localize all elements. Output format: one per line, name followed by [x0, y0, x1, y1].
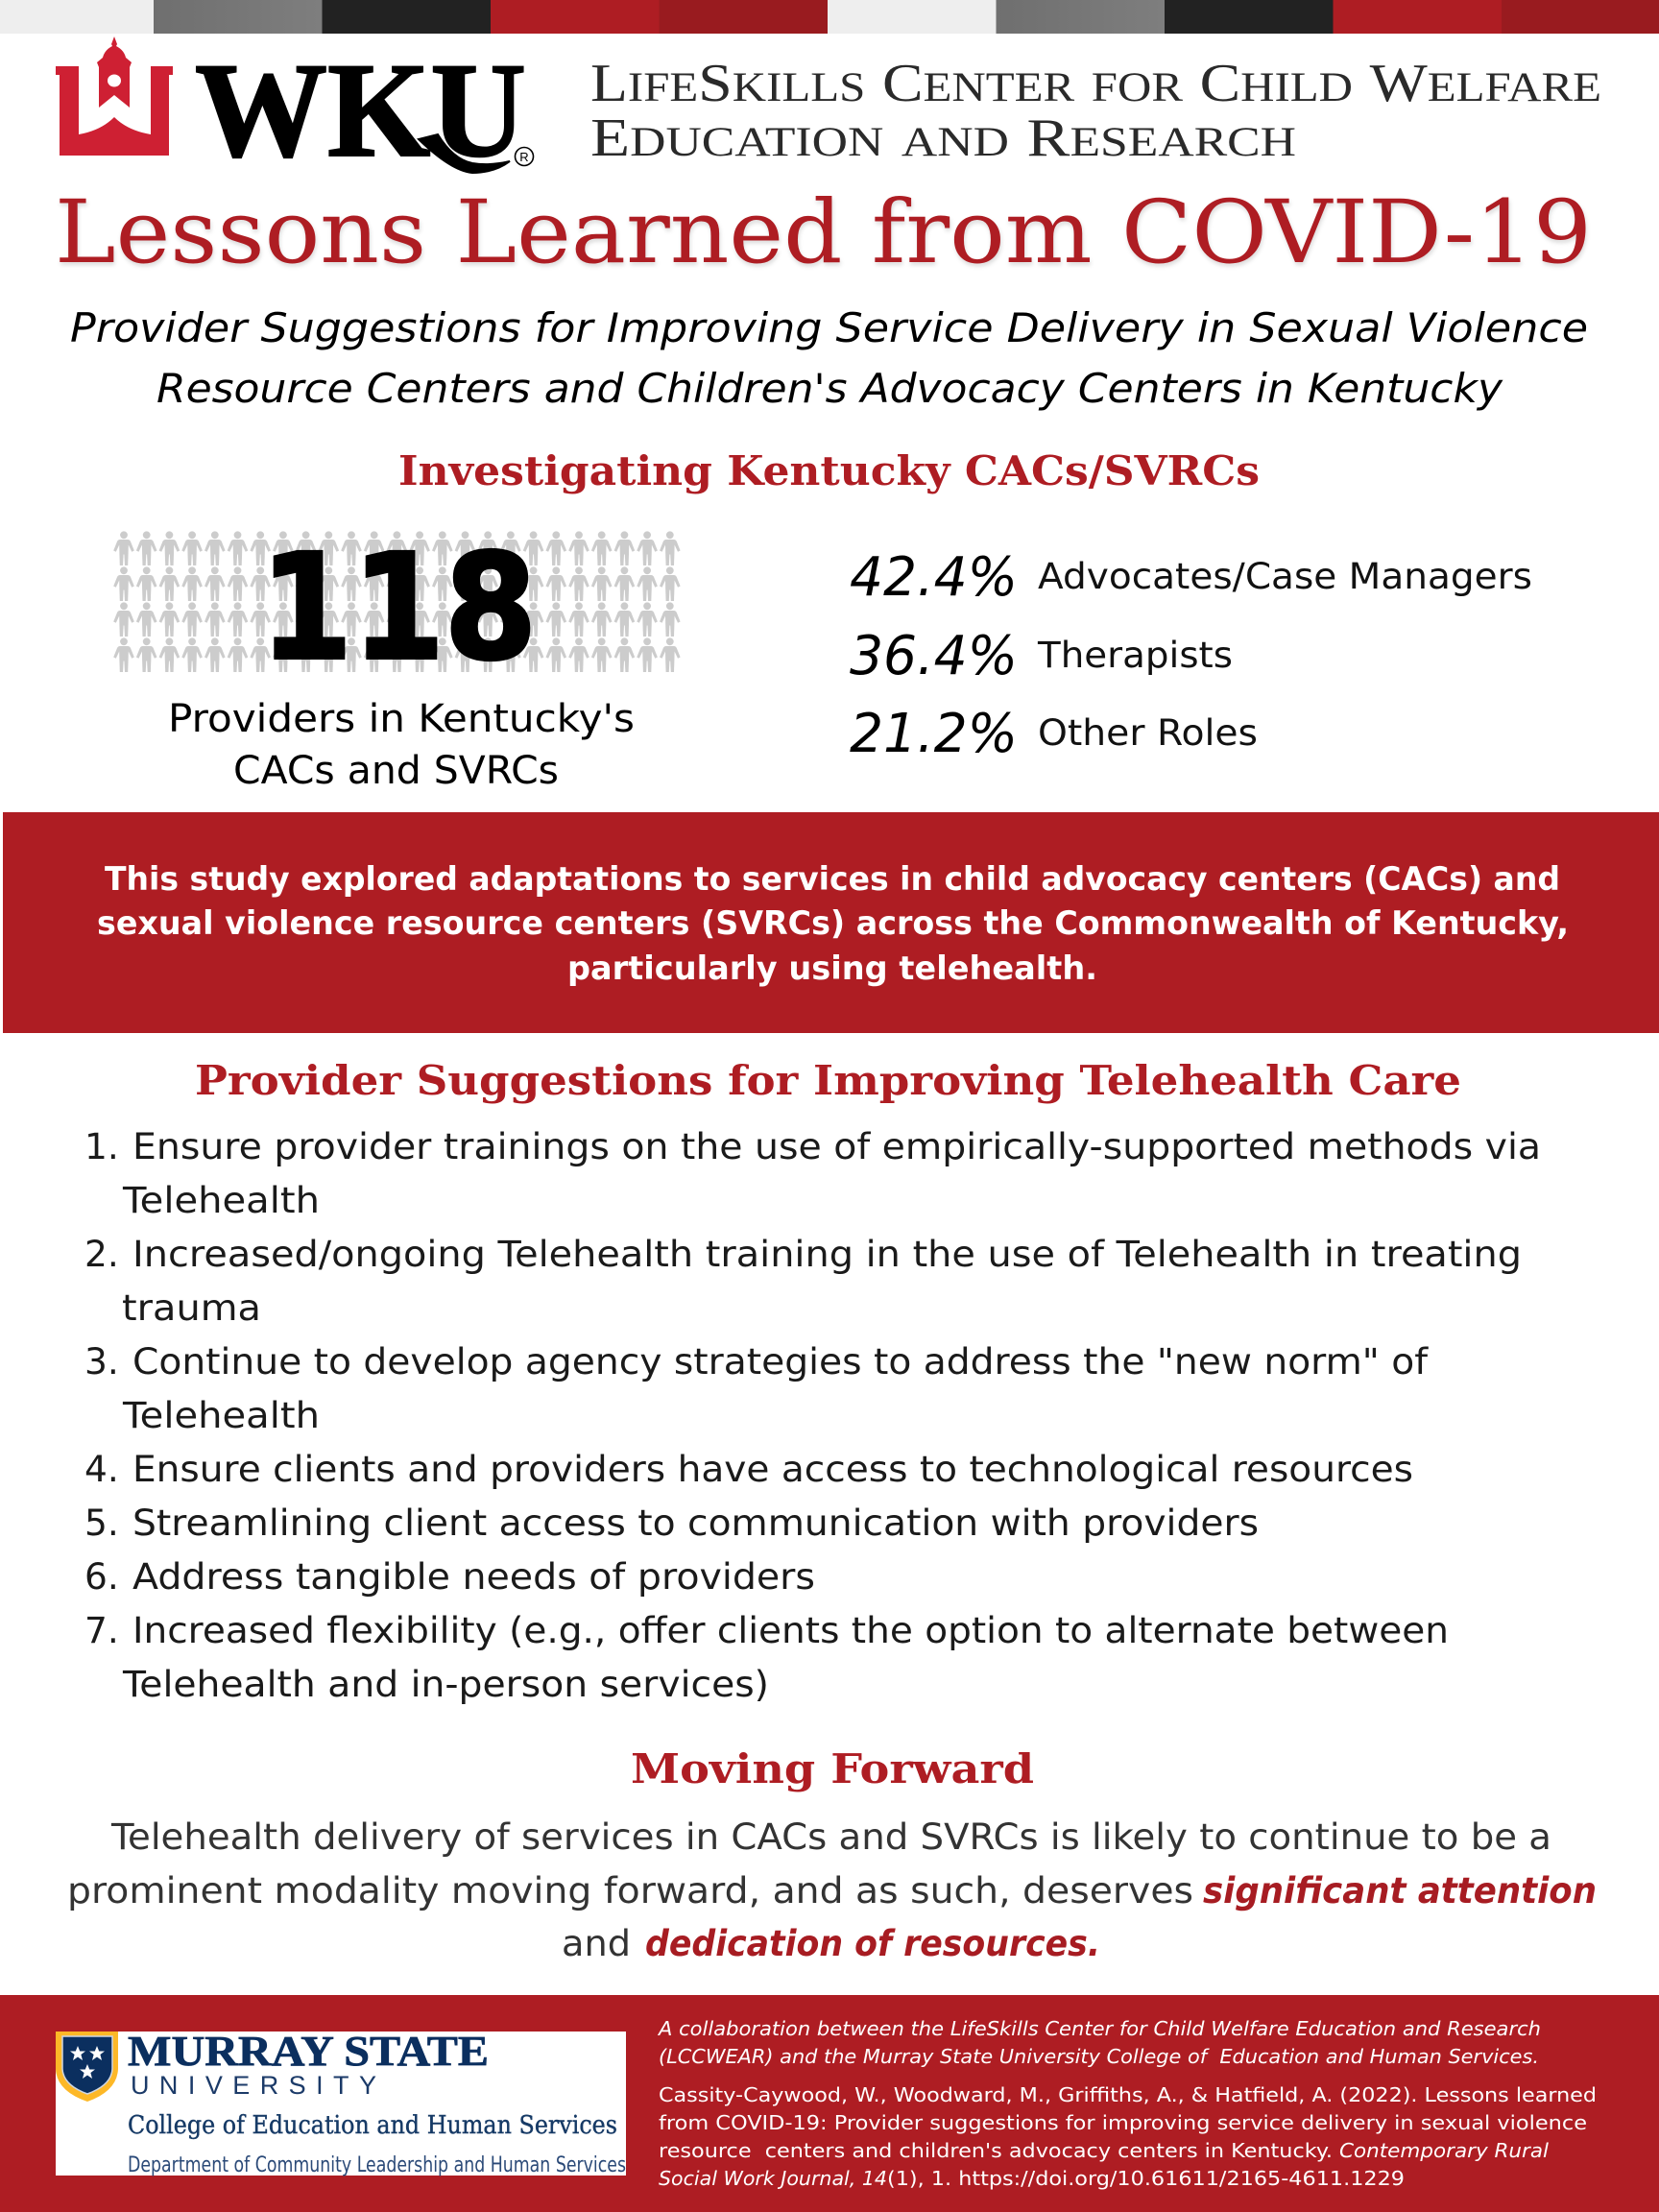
numbered list of suggestions: 3.: [84, 1340, 119, 1382]
role percentages: 21.2%: [850, 703, 1018, 765]
panel: study summary band: This study explored adaptations to services in child advocacy centers (CACs) and: [105, 860, 1560, 898]
numbered list of suggestions: Streamlining client access to communication with providers: [132, 1502, 1259, 1544]
numbered list of suggestions: 1.: [84, 1125, 119, 1167]
stat: 118: 118: [260, 523, 537, 692]
title: Lessons Learned from COVID-19: [55, 182, 1592, 283]
citation: from COVID-19: Provider suggestions for improving service delivery in sexual violence: [659, 2111, 1587, 2134]
collaboration statement: [657, 2017, 1541, 2068]
subtitle: [70, 304, 1588, 412]
moving forward paragraph: dedication of resources.: [645, 1922, 1100, 1964]
numbered list of suggestions: Address tangible needs of providers: [132, 1555, 815, 1598]
role percentages: Other Roles: [1038, 711, 1258, 754]
numbered list of suggestions: trauma: [122, 1286, 261, 1329]
numbered list of suggestions: 5.: [84, 1502, 119, 1544]
citation: Social Work Journal, 14: [659, 2167, 887, 2190]
moving forward paragraph: significant attention: [1203, 1869, 1597, 1911]
panel: study summary band: particularly using telehealth.: [567, 950, 1097, 987]
Murray State logo: [56, 2028, 626, 2177]
citation: resource centers and children's advocacy centers in Kentucky.: [659, 2139, 1333, 2162]
role percentages: 36.4%: [850, 625, 1018, 687]
subtitle: Resource Centers and Children's Advocacy Centers in Kentucky: [156, 365, 1503, 412]
subtitle: Provider Suggestions for Improving Service Delivery in Sexual Violence: [70, 304, 1588, 351]
numbered list of suggestions: [84, 1125, 1541, 1705]
citation: [659, 2083, 1597, 2190]
numbered list of suggestions: 4.: [84, 1448, 119, 1490]
heading: provider suggestions: Provider Suggestions for Improving Telehealth Care: [195, 1057, 1461, 1104]
numbered list of suggestions: Increased/ongoing Telehealth training in the use of Telehealth in treating: [132, 1233, 1522, 1275]
panel: study summary band: sexual violence resource centers (SVRCs) across the Commonwealth of Kentucky,: [97, 904, 1569, 942]
collaboration statement: A collaboration between the LifeSkills Center for Child Welfare Education and Research: [657, 2017, 1541, 2040]
role percentages: 42.4%: [850, 546, 1018, 609]
numbered list of suggestions: Ensure provider trainings on the use of empirically-supported methods via: [132, 1125, 1541, 1167]
Murray State logo: UNIVERSITY: [131, 2071, 376, 2100]
moving forward paragraph: Telehealth delivery of services in CACs and SVRCs is likely to continue to be a: [110, 1815, 1551, 1858]
icon: Murray State shield: [56, 2032, 118, 2102]
stat caption: [168, 697, 635, 793]
numbered list of suggestions: Continue to develop agency strategies to address the "new norm" of: [132, 1340, 1429, 1382]
centre name: LifeSkills Center for Child Welfare: [590, 49, 1601, 114]
Murray State logo: College of Education and Human Services: [128, 2111, 617, 2140]
moving forward paragraph: prominent modality moving forward, and as such, deserves: [67, 1869, 1193, 1911]
numbered list of suggestions: 6.: [84, 1555, 119, 1598]
citation: (1), 1. https://doi.org/10.61611/2165-4611.1229: [887, 2167, 1405, 2190]
stat caption: Providers in Kentucky's: [168, 697, 635, 741]
collaboration statement: (LCCWEAR) and the Murray State University College of Education and Human Services.: [659, 2045, 1539, 2068]
numbered list of suggestions: Telehealth and in-person services): [122, 1663, 769, 1705]
numbered list of suggestions: Telehealth: [122, 1394, 320, 1436]
numbered list of suggestions: Increased flexibility (e.g., offer clients the option to alternate between: [132, 1609, 1449, 1651]
WKU wordmark: WKU: [195, 36, 526, 185]
role percentages: Therapists: [1037, 634, 1233, 676]
top colour bar: [0, 0, 1659, 34]
WKU wordmark: R: [519, 150, 529, 164]
moving forward paragraph: and: [562, 1922, 631, 1964]
citation: Cassity-Caywood, W., Woodward, M., Griffiths, A., & Hatfield, A. (2022). Lessons learned: [659, 2083, 1597, 2106]
heading: investigating: Investigating Kentucky CACs/SVRCs: [398, 447, 1260, 494]
role percentages: Advocates/Case Managers: [1038, 555, 1532, 597]
icon: grid of people: [113, 531, 681, 672]
numbered list of suggestions: Telehealth: [122, 1179, 320, 1221]
role percentages: [850, 546, 1532, 765]
panel: footer background: [0, 1995, 1659, 2212]
moving forward paragraph: [67, 1815, 1597, 1964]
heading: moving forward: Moving Forward: [631, 1745, 1034, 1792]
citation: Contemporary Rural: [1339, 2139, 1549, 2162]
numbered list of suggestions: 2.: [84, 1233, 119, 1275]
stat caption: CACs and SVRCs: [233, 749, 559, 793]
icon: WKU tower logo: [56, 36, 173, 156]
centre name: Education and Research: [590, 104, 1296, 169]
Murray State logo: Department of Community Leadership and Human Services: [128, 2153, 626, 2177]
panel: study summary band: [3, 812, 1659, 1033]
centre name: [590, 49, 1601, 169]
numbered list of suggestions: 7.: [84, 1609, 119, 1651]
numbered list of suggestions: Ensure clients and providers have access to technological resources: [132, 1448, 1413, 1490]
Murray State logo: MURRAY STATE: [128, 2028, 489, 2075]
